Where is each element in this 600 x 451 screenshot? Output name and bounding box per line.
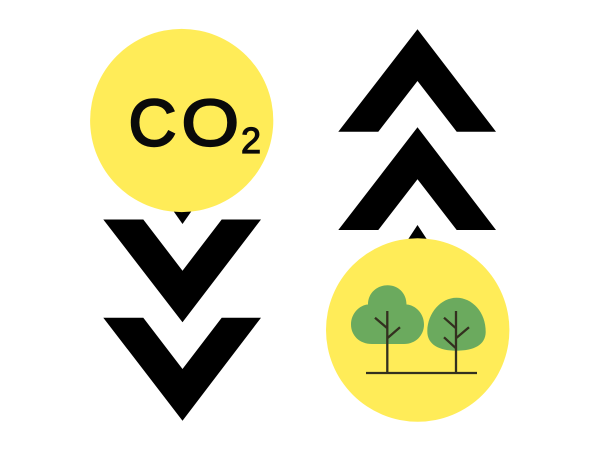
label: C: C: [129, 86, 176, 160]
right column: trees going up: [326, 29, 509, 422]
arrow: upper down chevron: [103, 220, 261, 322]
left column: CO2 going down: [90, 29, 273, 421]
icon: hidden chevron tip above tree circle: [407, 225, 428, 241]
icon: CO2 circle: [90, 29, 273, 212]
left tree crown: [351, 285, 424, 344]
label: subscript 2: 2: [241, 120, 261, 161]
icon: trees circle: [326, 238, 509, 422]
yellow disc: [90, 29, 273, 212]
icon: hidden chevron tip under CO2 circle: [172, 209, 193, 224]
arrow: lower up chevron: [338, 127, 496, 230]
arrow: lower down chevron: [103, 318, 261, 421]
yellow disc: [326, 238, 509, 422]
arrow: upper up chevron: [338, 29, 496, 132]
ground and trunks: [366, 311, 477, 373]
label: O: O: [182, 86, 239, 160]
right tree crown: [427, 298, 486, 351]
